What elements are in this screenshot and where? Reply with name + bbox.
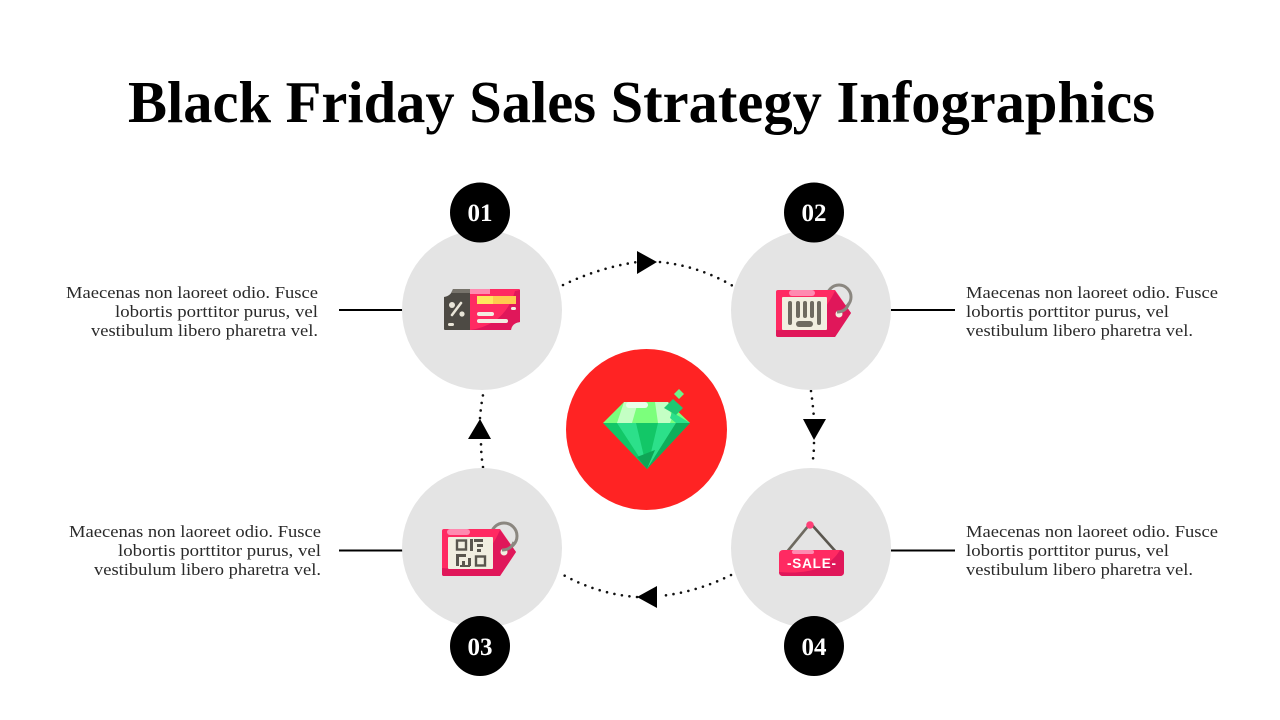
step 1 circle (402, 230, 562, 390)
text: step 3 description: Maecenas non laoreet odio. Fusce (69, 522, 321, 541)
step 4 circle (731, 468, 891, 628)
connector: bottom left (339, 550, 403, 552)
text: step 1 description: Maecenas non laoreet odio. Fusce (66, 283, 318, 302)
badge 01 (450, 182, 510, 242)
text: step 3 description: vestibulum libero pharetra vel. (94, 560, 321, 579)
text: step 1 description: lobortis porttitor purus, vel (115, 302, 318, 321)
badge 03 (450, 616, 510, 676)
icon: sale sign (779, 521, 844, 576)
badge 04 (784, 616, 844, 676)
text: step 4 description: vestibulum libero pharetra vel. (966, 560, 1193, 579)
badge 02 (784, 182, 844, 242)
arrow: step 1 to 2 (563, 251, 733, 286)
icon: barcode tag (776, 285, 851, 337)
text: step 1 description (66, 283, 318, 340)
arrow: step 2 to 4 (803, 391, 826, 465)
icon: discount ticket (444, 289, 520, 330)
badge 04: 04 (802, 634, 827, 661)
step 3 circle (402, 468, 562, 628)
text: step 4 description: Maecenas non laoreet odio. Fusce (966, 522, 1218, 541)
badge 02: 02 (802, 200, 826, 227)
text: step 2 description: vestibulum libero pharetra vel. (966, 321, 1193, 340)
arrow: step 4 to 3 (560, 573, 731, 608)
badge 01: 01 (468, 200, 492, 227)
text: step 4 description: lobortis porttitor purus, vel (966, 541, 1169, 560)
center red circle (566, 349, 727, 510)
text: step 2 description: Maecenas non laoreet odio. Fusce (966, 283, 1218, 302)
step 2 circle (731, 230, 891, 390)
text: step 1 description: vestibulum libero pharetra vel. (91, 321, 318, 340)
text: step 2 description: lobortis porttitor purus, vel (966, 302, 1169, 321)
text: step 2 description (966, 283, 1218, 340)
icon: sale sign: -SALE- (787, 556, 836, 571)
icon: QR code tag (442, 523, 517, 576)
badge 03: 03 (468, 634, 492, 661)
text: step 4 description (966, 522, 1218, 579)
connector: bottom right (891, 550, 955, 552)
text: step 3 description (69, 522, 321, 579)
text: step 3 description: lobortis porttitor purus, vel (118, 541, 321, 560)
connector: top left (339, 309, 403, 311)
arrow: step 3 to 1 (468, 390, 491, 467)
icon: green gem (603, 389, 690, 469)
title: Black Friday Sales Strategy Infographics (128, 69, 1155, 135)
connector: top right (891, 309, 955, 311)
